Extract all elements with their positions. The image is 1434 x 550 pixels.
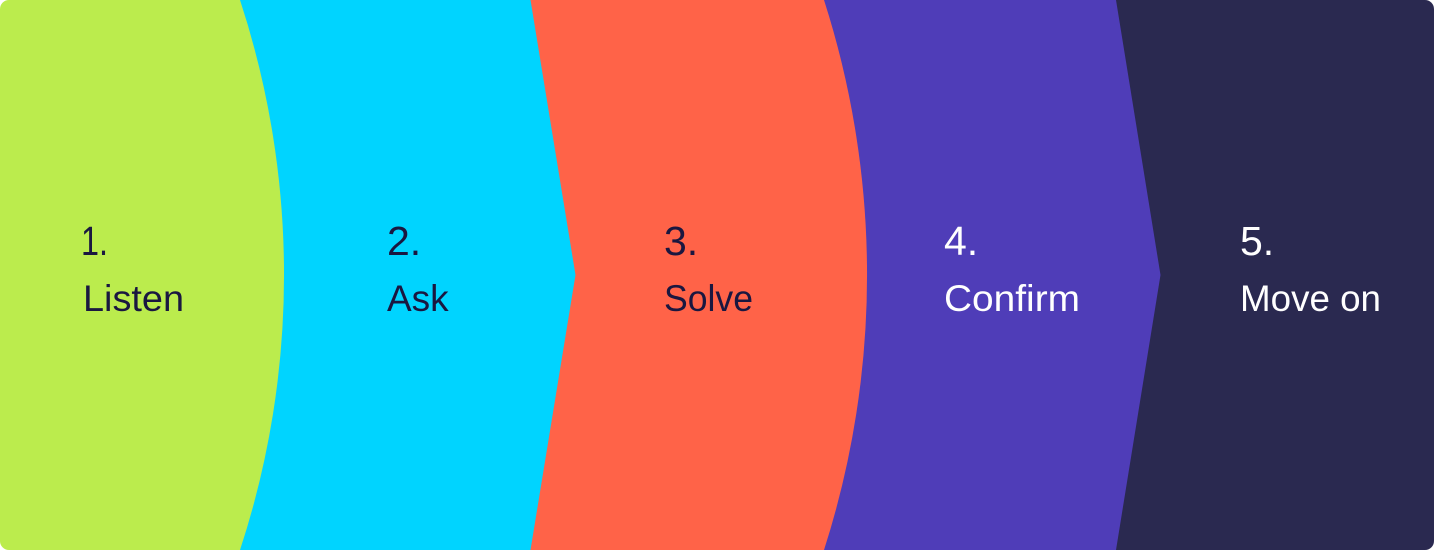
step 4 text: [944, 218, 1080, 319]
step 2 label: Ask: [387, 278, 449, 319]
step 5 label: Move on: [1240, 278, 1381, 319]
step 2 text: [387, 218, 449, 319]
step 3 number: 3.: [664, 218, 698, 264]
panel: step 1 background: [0, 0, 284, 550]
step 3 label: Solve: [664, 278, 753, 319]
step 4 label: Confirm: [944, 278, 1080, 319]
panel: step 4 background: [824, 0, 1160, 550]
step 5 number: 5.: [1240, 218, 1274, 264]
step 3 text: [664, 218, 753, 319]
step 1 label: Listen: [83, 278, 184, 319]
panel: step 5 background: [1116, 0, 1434, 550]
panel: step 2 background: [240, 0, 576, 550]
panel: step 3 background: [500, 0, 867, 550]
step 1 text: [81, 218, 184, 319]
step 5 text: [1240, 218, 1381, 319]
step 4 number: 4.: [944, 218, 978, 264]
step 2 number: 2.: [387, 218, 421, 264]
step 1 number: 1.: [81, 218, 108, 264]
